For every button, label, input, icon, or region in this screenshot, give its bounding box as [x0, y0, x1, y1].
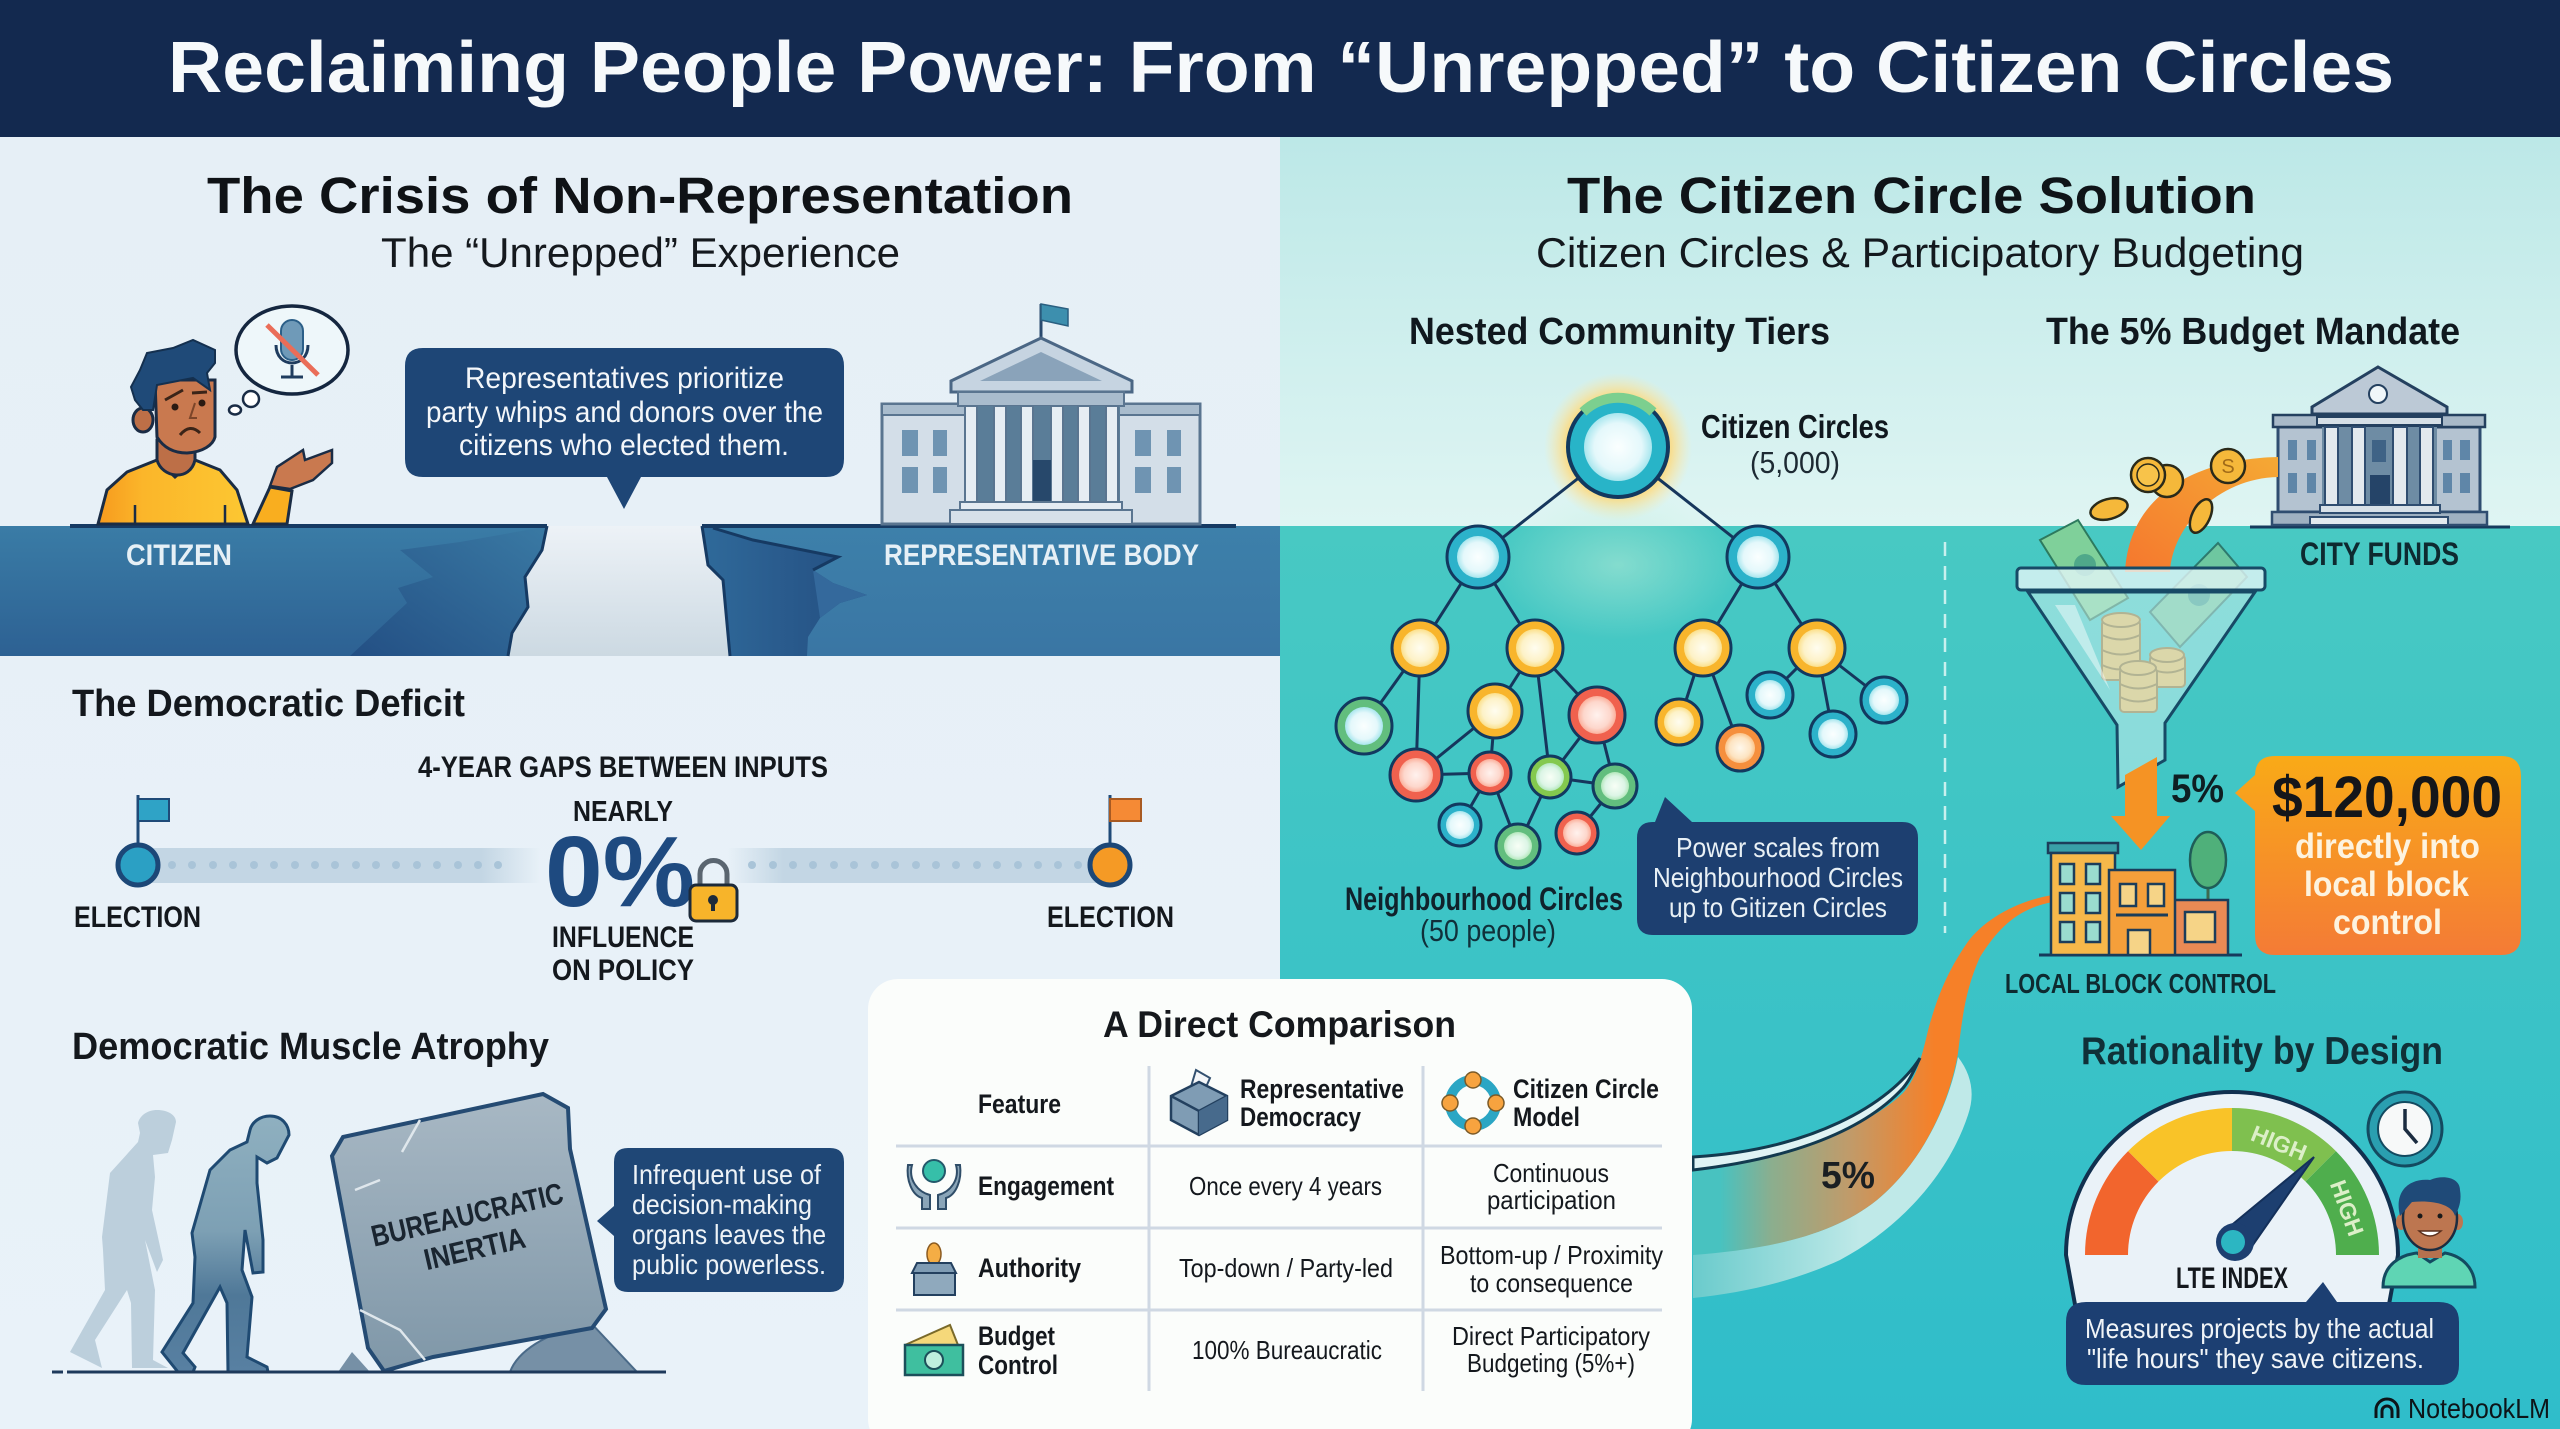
- row: budget control: 100% Bureaucratic: [1192, 1335, 1382, 1365]
- column header: representative democracy: Democracy: [1240, 1102, 1361, 1132]
- callout: infrequent use: organs leaves the: [632, 1219, 826, 1250]
- callout: LTE measure: Measures projects by the actual: [2085, 1313, 2434, 1344]
- gauge labels: high: HIGH: [2247, 1120, 2311, 1166]
- gauge labels: high: HIGH: [2325, 1177, 2369, 1239]
- gauge labels: high: [2247, 1120, 2369, 1239]
- icon: falling coins: [2088, 449, 2245, 536]
- chart: LTE index gauge: [2066, 1092, 2398, 1310]
- row: engagement: [908, 1158, 1616, 1215]
- label: citizen circles: Citizen Circles: [1701, 408, 1889, 445]
- icon: padlock: [690, 860, 737, 921]
- nodes: second tier: [1447, 526, 1789, 588]
- row: engagement: Engagement: [978, 1171, 1114, 1201]
- gauge segment: green: [2321, 1166, 2358, 1255]
- nodes: third tier: [1392, 620, 1845, 676]
- row: engagement: Continuous: [1493, 1158, 1609, 1188]
- gauge segment: red: [2106, 1166, 2143, 1255]
- row: budget control: Direct Participatory: [1452, 1321, 1650, 1351]
- callout: infrequent use: [597, 1148, 844, 1292]
- panel: a direct comparison table: [868, 979, 1692, 1429]
- table heading: A Direct Comparison: [1103, 1004, 1456, 1045]
- right panel background: [1280, 137, 2560, 1429]
- icon: hands holding circle: [908, 1160, 960, 1209]
- callout: $120,000: control: [2333, 903, 2442, 942]
- callout: $120,000: directly into: [2295, 827, 2480, 866]
- heading: democratic muscle atrophy: Democratic Muscle Atrophy: [72, 1026, 549, 1068]
- arrow: funds arc into funnel: [2125, 457, 2278, 572]
- label: citizen circles: (5,000): [1750, 445, 1840, 480]
- icon: local block buildings: [2039, 832, 2242, 955]
- row: authority: [912, 1240, 1663, 1298]
- label: neighbourhood circles: (50 people): [1420, 913, 1556, 948]
- stat: zero percent: 0%: [545, 816, 695, 928]
- citizen figure: [98, 340, 332, 524]
- icon: ballot box: [1171, 1070, 1227, 1135]
- label: citizen: CITIZEN: [126, 539, 232, 572]
- label: influence on policy: INFLUENCE: [552, 921, 694, 954]
- panel: the citizen circle solution: [1336, 167, 2521, 1385]
- atrophy illustration: [52, 1094, 666, 1372]
- icon: muted microphone thought bubble: [229, 306, 348, 414]
- icon: authority box: [912, 1243, 956, 1295]
- title: Reclaiming People Power: From “Unrepped” to Citizen Circles: [168, 28, 2394, 108]
- figure: fading citizen: [70, 1110, 176, 1368]
- column header: citizen circle model: [1513, 1074, 1659, 1132]
- subheading: participatory budgeting: Citizen Circles & Participatory Budgeting: [1536, 229, 2304, 276]
- heading: citizen circle solution: The Citizen Circle Solution: [1567, 167, 2256, 224]
- label: five percent: 5%: [2171, 767, 2224, 811]
- subheading: unrepped experience: The “Unrepped” Experience: [381, 229, 900, 276]
- callout: representatives: citizens who elected them.: [459, 429, 789, 462]
- row: authority: Authority: [978, 1253, 1081, 1283]
- row: engagement: participation: [1487, 1185, 1616, 1215]
- label: election right: ELECTION: [1047, 901, 1174, 934]
- row: authority: Bottom-up / Proximity: [1440, 1240, 1663, 1270]
- column header: citizen circle model: Citizen Circle: [1513, 1074, 1659, 1104]
- marker: first election: [118, 795, 169, 885]
- callout: $120,000: local block: [2304, 865, 2469, 904]
- icon: money: [905, 1325, 963, 1375]
- heading: crisis: The Crisis of Non-Representation: [207, 167, 1073, 224]
- heading: budget mandate: The 5% Budget Mandate: [2046, 311, 2460, 353]
- row: budget control: Budgeting (5%+): [1467, 1348, 1635, 1378]
- label: ribbon five percent: 5%: [1821, 1155, 1875, 1197]
- label: 4-year gaps: 4-YEAR GAPS BETWEEN INPUTS: [418, 751, 828, 784]
- row: authority: to consequence: [1470, 1268, 1633, 1298]
- label: local block control: LOCAL BLOCK CONTROL: [2005, 968, 2276, 999]
- icon: government building with flag: [882, 304, 1200, 524]
- callout: representatives: party whips and donors over the: [426, 396, 823, 429]
- gauge segment: yellow: [2143, 1130, 2232, 1166]
- gauge label: LTE INDEX: [2176, 1262, 2288, 1295]
- heading: rationality by design: Rationality by Design: [2081, 1030, 2443, 1073]
- figure: stooped citizen: [162, 1116, 289, 1372]
- column header: representative democracy: Representative: [1240, 1074, 1404, 1104]
- panel: the crisis of non-representation: [0, 167, 1280, 1372]
- icon: smiling citizen: [2383, 1177, 2475, 1287]
- row: engagement: Once every 4 years: [1189, 1171, 1382, 1201]
- callout: $120,000: $120,000: [2272, 765, 2502, 830]
- column header: representative democracy: [1240, 1074, 1404, 1132]
- icon: funnel with money: [2017, 520, 2265, 787]
- callout: representatives: Representatives prioritize: [465, 362, 784, 395]
- heading: democratic deficit: The Democratic Deficit: [72, 683, 465, 725]
- gauge needle: [2216, 1157, 2314, 1261]
- callout: LTE measure: "life hours" they save citizens.: [2087, 1343, 2424, 1374]
- left panel background: [0, 137, 1280, 1429]
- label: influence on policy: ON POLICY: [552, 954, 694, 987]
- network diagram: nested tiers: [1336, 373, 1907, 868]
- callout: infrequent use: decision-making: [632, 1189, 812, 1220]
- callout: power scales: up to Gitizen Circles: [1669, 892, 1887, 923]
- label: election left: ELECTION: [74, 901, 201, 934]
- label: neighbourhood circles: [1345, 881, 1623, 948]
- icon: citizen circle ring: [1442, 1072, 1504, 1134]
- callout: $120,000: [2235, 756, 2521, 955]
- callout: power scales: Power scales from: [1676, 832, 1880, 863]
- row: budget control: Control: [978, 1350, 1058, 1380]
- header banner: [0, 0, 2560, 137]
- row: budget control: [905, 1321, 1650, 1380]
- icon: clock: [2368, 1092, 2442, 1166]
- label: representative body: REPRESENTATIVE BODY: [884, 539, 1199, 572]
- row: authority: Top-down / Party-led: [1179, 1253, 1393, 1283]
- icon: falling coins: S: [2221, 456, 2235, 478]
- boulder: bureaucratic inertia: BUREAUCRATIC: [368, 1177, 567, 1254]
- label: city funds: CITY FUNDS: [2300, 536, 2459, 572]
- callout: representatives: [405, 348, 844, 509]
- heading: nested community tiers: Nested Community Tiers: [1409, 311, 1830, 353]
- marker: second election: [1090, 795, 1141, 885]
- node: citizen circle top tier: [1568, 397, 1668, 497]
- callout: infrequent use: Infrequent use of: [632, 1159, 821, 1190]
- icon: city funds building: [2250, 367, 2510, 527]
- callout: infrequent use: public powerless.: [632, 1249, 826, 1280]
- label: influence on policy: [552, 921, 694, 987]
- arrow: ribbon of budget funds: [1693, 895, 2053, 1298]
- nodes: neighbourhood circles: [1336, 672, 1907, 868]
- label: citizen circles: [1701, 408, 1889, 480]
- timeline: [118, 795, 1141, 885]
- label: neighbourhood circles: Neighbourhood Circles: [1345, 881, 1623, 917]
- callout: LTE measure: [2066, 1282, 2459, 1385]
- column header: feature: Feature: [978, 1089, 1061, 1119]
- row: budget control: Budget: [978, 1321, 1055, 1351]
- boulder: bureaucratic inertia: INERTIA: [421, 1222, 529, 1277]
- gauge segment: light green: [2232, 1130, 2321, 1166]
- column header: citizen circle model: Model: [1513, 1102, 1580, 1132]
- label: nearly: NEARLY: [573, 796, 673, 828]
- arrow: five percent to local block: [2111, 757, 2170, 850]
- cliff chasm scene: [0, 524, 1280, 656]
- callout: power scales: [1637, 797, 1918, 935]
- callout: power scales: Neighbourhood Circles: [1653, 862, 1903, 893]
- boulder: bureaucratic inertia: [332, 1094, 637, 1372]
